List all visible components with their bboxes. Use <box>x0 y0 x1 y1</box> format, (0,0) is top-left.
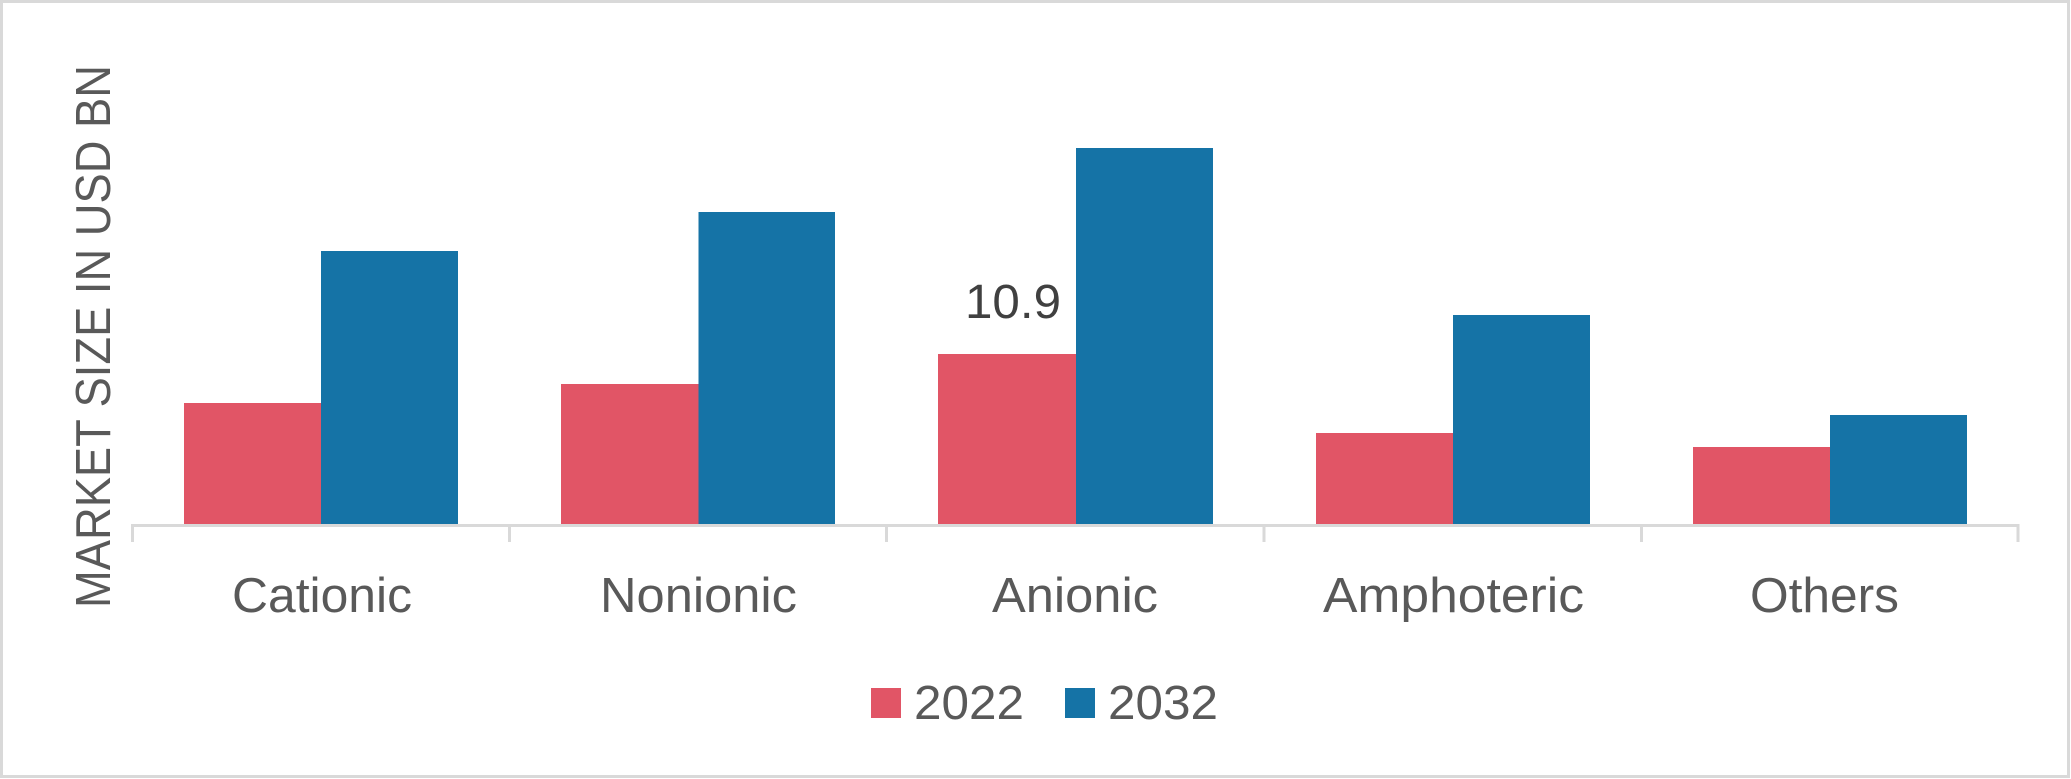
category labels: Cationic <box>232 569 412 623</box>
category labels: Nonionic <box>600 569 797 623</box>
legend <box>871 677 1218 730</box>
bar group: Amphoteric <box>1316 315 1590 524</box>
legend item: 2022: 2022 <box>914 677 1024 730</box>
y-axis title: MARKET SIZE IN USD BN <box>67 65 121 608</box>
bar group: Nonionic <box>561 212 835 524</box>
category labels: Others <box>1750 569 1899 623</box>
bar group: Others <box>1693 415 1967 524</box>
bar group: Anionic <box>938 148 1213 524</box>
legend item: 2022 <box>871 677 1024 730</box>
legend item: 2032 <box>1065 677 1218 730</box>
x axis with tick marks <box>132 526 2018 542</box>
category labels <box>232 569 1899 623</box>
category labels: Anionic <box>992 569 1158 623</box>
bar group: Cationic <box>184 251 458 524</box>
legend item: 2032: 2032 <box>1108 677 1218 730</box>
category labels: Amphoteric <box>1323 569 1584 623</box>
data label: 10.9: 10.9 <box>965 276 1061 329</box>
